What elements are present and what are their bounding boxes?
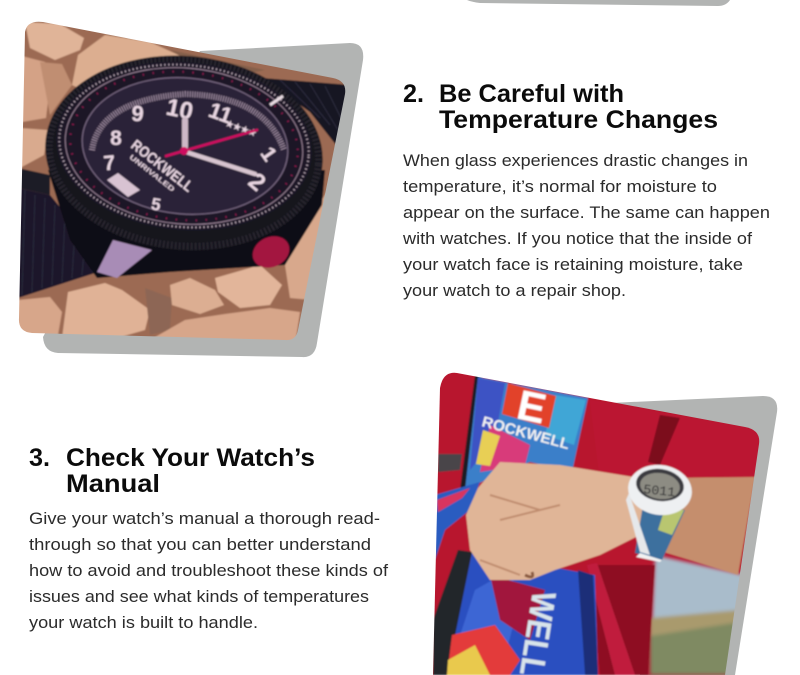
- numerals: 10: [164, 94, 195, 126]
- hands: [166, 120, 257, 174]
- brand lettering: ROCKWELL: [480, 413, 571, 453]
- top gray shape remnant: [467, 0, 730, 6]
- text block: tip 2 body: appear on the surface. The same can happen: [403, 203, 770, 222]
- panel: digital watch photo with gray backing: [430, 370, 777, 675]
- stars logo: ★★★★: [224, 118, 259, 139]
- text block: tip 3 body: [29, 509, 388, 632]
- gray backing shape 1: [43, 43, 363, 357]
- numerals: 5: [150, 194, 162, 215]
- numerals: ROCKWELL: [128, 137, 196, 196]
- heading: tip 2: Temperature Changes: [439, 106, 718, 134]
- numerals: 8: [110, 127, 122, 150]
- text block: tip 3 body: Give your watch’s manual a thorough read-: [29, 509, 380, 528]
- heading: tip 2: 2.: [403, 80, 424, 108]
- tie-dye band lower: [447, 552, 598, 675]
- numerals: 2: [243, 168, 271, 197]
- rocks top: [18, 22, 265, 168]
- watch case: [48, 170, 325, 278]
- crown: [251, 234, 291, 268]
- panel: watch photo with gray backing: [18, 22, 364, 358]
- text block: tip 2 body: your watch to a repair shop.: [403, 281, 626, 300]
- numerals: 9: [130, 101, 145, 127]
- text block: tip 3 body: through so that you can better understand: [29, 535, 371, 554]
- watch display digits: 5011: [643, 482, 676, 500]
- red logo square: [502, 383, 556, 428]
- dial: [80, 76, 290, 216]
- text block: tip 3 body: your watch is built to handle.: [29, 613, 258, 632]
- bezel scale: [56, 62, 312, 230]
- forearm: [665, 476, 754, 575]
- numerals: UNRIVALED: [128, 154, 175, 193]
- gray backing shape 2: [610, 396, 777, 675]
- background: wall and grass: [650, 555, 745, 675]
- lower shirt: [590, 565, 655, 675]
- photo: wrist with tie-dye bag: [430, 370, 770, 675]
- numerals: 7: [103, 152, 116, 175]
- strap lower left: [18, 188, 102, 298]
- heading: tip 2: [403, 80, 718, 134]
- text block: tip 3 body: how to avoid and troubleshoot these kinds of: [29, 561, 388, 580]
- numerals: [103, 94, 281, 215]
- text block: tip 3 body: issues and see what kinds of temperatures: [29, 587, 369, 606]
- bezel tick: [270, 96, 283, 105]
- text block: tip 2 body: When glass experiences drastic changes in: [403, 151, 748, 170]
- photo: field watch on rocks: [18, 22, 346, 340]
- hand and wrist: [466, 462, 645, 580]
- heading: tip 3: [29, 444, 315, 498]
- purple lug: [97, 240, 152, 278]
- flag: [107, 173, 140, 197]
- heading: tip 2: Be Careful with: [439, 80, 624, 108]
- watch strap tie-dye: [635, 505, 685, 560]
- heading: tip 3: Manual: [66, 470, 160, 498]
- heading: tip 3: 3.: [29, 444, 50, 472]
- watch case white: [627, 464, 693, 516]
- text block: tip 2 body: temperature, it’s normal for moisture to: [403, 177, 717, 196]
- rocks bottom and right: [18, 190, 328, 345]
- text block: tip 2 body: with watches. If you notice that the inside of: [402, 229, 752, 248]
- text block: tip 2 body: [402, 151, 770, 300]
- numerals: 11: [205, 97, 236, 129]
- tie-dye band upper: [465, 377, 588, 490]
- strap upper right: [266, 78, 346, 144]
- logo mark: E: [513, 381, 550, 433]
- numerals: 1: [256, 143, 281, 166]
- bezel knurled outer: [44, 54, 324, 251]
- heading: tip 3: Check Your Watch’s: [66, 444, 315, 472]
- text block: tip 2 body: your watch face is retaining moisture, take: [403, 255, 743, 274]
- left black strap: [460, 375, 482, 490]
